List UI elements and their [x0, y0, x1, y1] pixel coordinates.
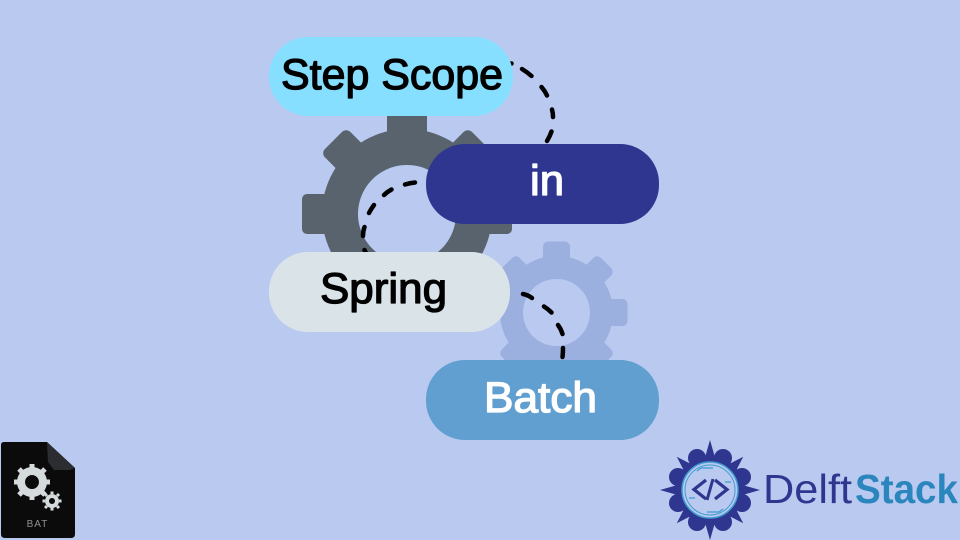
logo: DelftStack mandala: [660, 440, 760, 540]
icon: BAT file: BAT: [27, 519, 48, 530]
logo: DelftStack wordmark: Delft: [763, 466, 853, 512]
pill: Step Scope: [269, 37, 513, 116]
pill: Batch: Batch: [484, 374, 597, 422]
dashed connector: Spring to Batch: [523, 294, 563, 357]
pill: Batch: [426, 360, 659, 440]
pill: in: in: [530, 157, 564, 205]
pill: Spring: Spring: [320, 265, 447, 313]
dashed connector: Step Scope to in: [511, 64, 553, 141]
pill: Spring: [269, 252, 510, 332]
pill: in: [426, 144, 659, 224]
icon: BAT file: [1, 442, 75, 538]
icon: large dark gear: [302, 109, 512, 300]
logo: DelftStack wordmark: [763, 466, 958, 512]
pill: Step Scope: Step Scope: [281, 51, 503, 99]
icon: small pale gear: [498, 242, 628, 371]
dashed connector: in to Spring: [363, 182, 415, 252]
